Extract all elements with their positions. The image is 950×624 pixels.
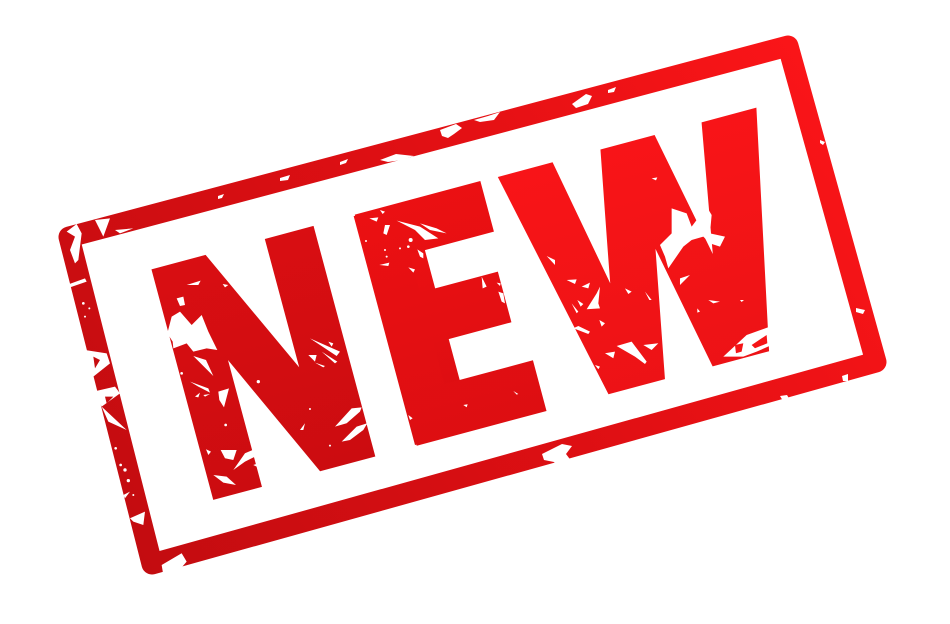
scratches on letter E xyxy=(365,210,518,420)
word NEW xyxy=(129,56,824,556)
letter W: W xyxy=(494,56,824,459)
letter N: N xyxy=(129,169,398,556)
scratches on frame left side xyxy=(67,218,187,575)
scratches on letter N xyxy=(167,281,367,485)
letter E: E xyxy=(330,118,565,507)
scratches on letter W xyxy=(547,177,772,369)
scratches on frame top, right and bottom xyxy=(218,72,865,468)
stamp frame xyxy=(69,46,876,564)
